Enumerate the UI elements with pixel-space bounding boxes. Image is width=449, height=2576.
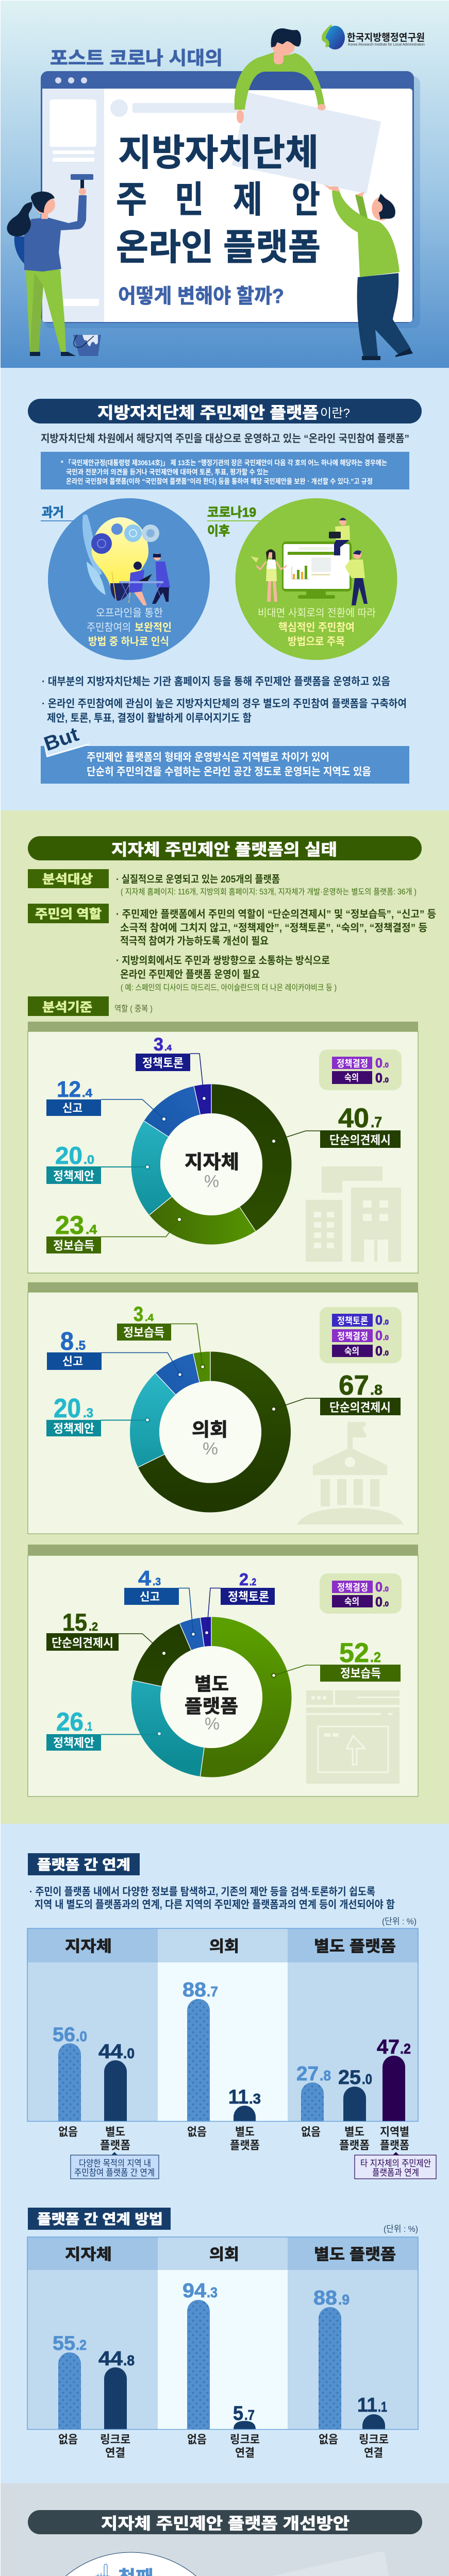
value: 88.7: 88 — [182, 1979, 206, 2001]
callout: policy proposal 26.1: 26 — [56, 1707, 84, 1736]
axis labels — [58, 2126, 409, 2151]
axis labels: 없음 — [319, 2433, 338, 2446]
legend: zero values: 0 — [375, 1328, 383, 1343]
note box: legal basis: * 「국민제안규정(대통령령 제30614호)」 제 13조는 “행정기관의 장은 국민제안이 다음 각 호의 어느 하나에 해당하는 경우에는 — [61, 459, 387, 467]
callout: policy proposal 20.0 — [46, 1142, 149, 1184]
callout: But: 단순히 주민의견을 수렴하는 온라인 공간 정도로 운영되는 지역도 있음 — [87, 766, 371, 778]
circle: after COVID online participation: 비대면 사회로의 전환에 따라 — [258, 607, 376, 619]
callout: local platforms — [71, 2152, 159, 2179]
legend: zero values: 0 — [375, 1594, 383, 1609]
heading pill: 지방자치단체 주민제안 플랫폼 — [97, 404, 319, 422]
illustration: monitor and people — [251, 518, 368, 605]
callout: simple opinion 67.8: .8 — [370, 1382, 383, 1398]
axis labels — [58, 2433, 389, 2460]
callout: information 23.4 — [46, 1211, 181, 1253]
value: 25.0: .0 — [362, 2071, 372, 2087]
icon: web upload window — [306, 1690, 400, 1784]
value: 44.0: 44 — [98, 2041, 123, 2063]
panel: improvement plans — [1, 2483, 449, 2576]
icon: paint bucket — [73, 335, 101, 356]
legend: zero values: .0 — [383, 1585, 389, 1593]
value: 88.9 — [313, 2287, 350, 2309]
circle: first — [30, 2552, 232, 2576]
label: past — [41, 505, 77, 521]
axis labels: 링크로 — [100, 2433, 130, 2446]
callout: information 23.4: 정보습득 — [53, 1239, 94, 1252]
note box: legal basis — [41, 452, 409, 489]
legend: zero values: 0 — [375, 1070, 383, 1086]
value: 94.3 — [182, 2280, 218, 2302]
bar chart: links: 별도 플랫폼 — [314, 1938, 396, 1955]
legend: zero values: 정책토론 — [337, 1316, 368, 1326]
legend: zero values: 정책결정 — [337, 1331, 368, 1342]
callout: report 12.4: .4 — [82, 1087, 93, 1099]
center label: 별도 — [194, 1674, 229, 1694]
definition: 지방자치단체 차원에서 해당지역 주민을 대상으로 운영하고 있는 “온라인 국민참여 플랫폼” — [41, 433, 409, 445]
value: 11.3: 11 — [228, 2086, 248, 2108]
callout: simple opinion 15.2: .2 — [89, 1620, 98, 1633]
callout: local platforms: 주민참여 플랫폼 간 연계 — [74, 2167, 155, 2178]
heading: links between platforms: 플랫폼 간 연계 — [37, 1857, 130, 1873]
text: analysis target: ( 지자체 홈페이지: 116개, 지방의회 홈페이지: 53개, 지자체가 개발·운영하는 별도의 플랫폼: 36개 ) — [121, 887, 417, 896]
callout: information 3.4 — [117, 1303, 205, 1369]
title text: 온라인 플랫폼 — [116, 227, 321, 267]
heading pill: 지자체 주민제안 플랫폼 개선방안 — [101, 2515, 350, 2533]
text: role of residents: 소극적 참여에 그치지 않고, “정책제안”, “정책토론”, “숙의”, “정책결정” 등 — [120, 922, 427, 934]
circle: past offline participation: 방법 중 하나로 인식 — [88, 636, 169, 648]
value: 5.7: 5 — [233, 2402, 243, 2425]
bullet text — [42, 676, 407, 724]
callout: But: 주민제안 플랫폼의 형태와 운영방식은 지역별로 차이가 있어 — [87, 751, 329, 764]
circle: past offline participation: 오프라인을 통한 — [96, 607, 163, 619]
value: 88.9: 88 — [313, 2287, 337, 2309]
legend: zero values: 0 — [375, 1055, 383, 1071]
unit note: (단위 : %) — [384, 2224, 418, 2234]
value: 11.3: .3 — [249, 2091, 261, 2107]
heading pill — [28, 399, 422, 423]
callout: report 4.3: .3 — [153, 1576, 161, 1588]
text: analysis target — [116, 874, 417, 896]
callout: information 23.4: .4 — [86, 1223, 97, 1237]
axis labels: 없음 — [187, 2433, 207, 2446]
value: 47.2: 47 — [377, 2036, 400, 2058]
figure: man on top of window — [235, 28, 326, 123]
label: analysis criteria: 분석기준 — [42, 1001, 92, 1014]
title text: 지방자치단체 — [118, 133, 319, 174]
callout: information 23.4: 23 — [55, 1211, 84, 1240]
bar chart: links: 지자체 — [65, 1938, 112, 1955]
callout: report 4.3: 4 — [138, 1566, 151, 1590]
center label: 의회 — [192, 1419, 228, 1440]
legend: zero values: .0 — [383, 1333, 389, 1342]
callout: simple opinion 67.8: 단순의견제시 — [329, 1400, 391, 1414]
donut: council shares — [144, 1366, 276, 1498]
callout: simple opinion 15.2: 15 — [62, 1608, 87, 1636]
value: 88.7 — [182, 1979, 218, 2001]
text: link explanation: · 주민이 플랫폼 내에서 다양한 정보를 탐색하고, 기존의 제안 등을 검색·토론하기 쉽도록 — [29, 1886, 375, 1898]
bar chart: link method: 별도 플랫폼 — [314, 2246, 396, 2263]
legend: zero values: 0 — [375, 1343, 383, 1359]
callout: information 52.2: 52 — [339, 1638, 369, 1668]
panel: hero — [1, 1, 449, 368]
axis labels: 별도 — [105, 2126, 125, 2138]
center label — [192, 1419, 228, 1458]
bullet text: 제안, 토론, 투표, 결정이 활발하게 이루어지기도 함 — [47, 712, 252, 724]
bar chart: link method: 의회 — [209, 2246, 239, 2263]
bar chart: link method — [27, 2237, 418, 2460]
value: 27.8: .8 — [320, 2067, 331, 2083]
text: role of residents: · 주민제안 플랫폼에서 주민의 역할이 “단순의견제시” 및 “정보습득”, “신고” 등 — [116, 908, 436, 920]
callout: other regions — [355, 2152, 436, 2179]
circle: past offline participation: 보완적인 — [135, 621, 172, 634]
callout: simple opinion 40.7: .7 — [371, 1114, 382, 1131]
callout: policy proposal 20.3 — [46, 1394, 149, 1436]
logo: Korea Research Institute for Local Administration: Korea Research Institute for Local Administration — [348, 42, 425, 46]
label: after COVID-19: 이후 — [207, 524, 230, 538]
callout: report 8.5: 신고 — [62, 1355, 83, 1368]
bullet text: · 온라인 주민참여에 관심이 높은 지방자치단체의 경우 별도의 주민참여 플랫폼을 구축하여 — [42, 698, 407, 710]
callout: simple opinion 67.8: 67 — [339, 1370, 369, 1401]
callout: policy proposal 20.3: .3 — [83, 1406, 93, 1420]
center label: 지자체 — [185, 1151, 239, 1173]
center label: % — [205, 1714, 220, 1733]
value: 94.3: 94 — [182, 2280, 206, 2302]
label: analysis target — [28, 869, 109, 888]
callout: report 12.4 — [46, 1077, 166, 1121]
callout: report 8.5: .5 — [75, 1338, 86, 1353]
callout: simple opinion 40.7: 단순의견제시 — [329, 1133, 391, 1147]
value: 11.1: 11 — [357, 2394, 377, 2416]
callout: policy debate 2.2 — [205, 1570, 275, 1635]
value: 25.0 — [338, 2066, 372, 2089]
callout: policy debate 2.2: .2 — [250, 1577, 256, 1588]
circle: after COVID online participation: 핵심적인 주민참여 — [278, 621, 355, 634]
center label: 플랫폼 — [185, 1696, 238, 1717]
bar chart: links: 의회 — [209, 1938, 239, 1955]
value: 56.0: 56 — [53, 2024, 75, 2046]
title text: 주 — [116, 180, 147, 221]
panel: status of platforms — [1, 810, 449, 1824]
callout: policy proposal 20.3: 정책제안 — [53, 1422, 94, 1435]
axis labels: 없음 — [301, 2126, 321, 2138]
callout: information 52.2: .2 — [370, 1649, 381, 1665]
value: 44.0 — [98, 2041, 135, 2063]
figure: woman with paint roller — [7, 174, 93, 356]
logo: Korea Research Institute for Local Administration: 한국지방행정연구원 — [347, 32, 425, 43]
label: analysis criteria — [28, 996, 109, 1016]
legend: zero values: 숙의 — [344, 1346, 359, 1357]
callout: policy debate 3.4: 정책토론 — [142, 1056, 184, 1070]
text: analysis target: · 실질적으로 운영되고 있는 205개의 플랫폼 — [116, 874, 280, 885]
value: 55.2: .2 — [76, 2337, 87, 2353]
legend: zero values: .0 — [383, 1600, 389, 1608]
donut chart panel: separate platform — [28, 1545, 418, 1797]
circle: after COVID online participation — [235, 498, 397, 660]
callout: other regions: 타 지자체의 주민제안 — [360, 2158, 431, 2168]
axis labels: 연결 — [105, 2446, 125, 2460]
legend: zero values: .0 — [383, 1318, 389, 1326]
value: 27.8 — [296, 2063, 331, 2085]
heading pill: 지자체 주민제안 플랫폼의 실태 — [111, 841, 337, 859]
axis labels: 없음 — [58, 2126, 78, 2138]
label: past: 과거 — [42, 505, 64, 520]
callout: But: But — [41, 723, 81, 756]
text: role of residents: ( 예: 스페인의 디사이드 마드리드, 아이슬란드의 더 나은 레이카야비크 등 ) — [121, 983, 337, 992]
value: 11.1: .1 — [378, 2399, 387, 2415]
callout: policy debate 3.4: 3 — [154, 1035, 163, 1055]
value: 47.2 — [377, 2036, 411, 2058]
callout: policy proposal 20.0: 20 — [55, 1142, 82, 1169]
label: after COVID-19 — [207, 505, 260, 538]
legend: zero values: .0 — [383, 1076, 389, 1084]
axis labels: 플랫폼 — [230, 2139, 260, 2151]
center label: % — [203, 1439, 218, 1458]
donut: local government shares — [146, 1099, 277, 1230]
callout: report 12.4: 12 — [57, 1077, 81, 1102]
circle: past offline participation — [48, 498, 210, 660]
question text: 어떻게 변해야 할까? — [118, 285, 284, 308]
panel: what is a resident proposal platform — [1, 368, 449, 810]
callout: policy debate 3.4: .4 — [164, 1044, 172, 1053]
heading: link method — [28, 2208, 171, 2230]
callout: simple opinion 67.8 — [272, 1370, 401, 1415]
icon: one finger hand — [96, 2564, 109, 2576]
circle: after COVID online participation: 방법으로 주목 — [288, 636, 345, 648]
callout: information 3.4: 3 — [134, 1303, 143, 1326]
legend: zero values — [320, 1573, 402, 1614]
value: 44.8: 44 — [98, 2348, 123, 2370]
callout: simple opinion 40.7 — [272, 1103, 401, 1148]
text: role of residents: · 지방의회에서도 주민과 쌍방향으로 소통하는 방식으로 — [116, 955, 330, 967]
browser window illustration — [41, 71, 420, 328]
text: criteria: 역할 ( 중복 ) — [114, 1004, 153, 1013]
legend: zero values: .0 — [383, 1349, 389, 1357]
callout: simple opinion 15.2 — [46, 1608, 166, 1655]
title text: 제 — [233, 180, 262, 221]
text: role of residents: 적극적 참여가 가능하도록 개선이 필요 — [120, 935, 269, 947]
axis labels: 플랫폼 — [339, 2139, 370, 2151]
bullet text: · 대부분의 지방자치단체는 기관 홈페이지 등을 통해 주민제안 플랫폼을 운영하고 있음 — [42, 676, 390, 687]
callout: policy proposal 26.1 — [46, 1707, 161, 1751]
axis labels: 플랫폼 — [100, 2139, 130, 2151]
value: 55.2: 55 — [53, 2332, 75, 2354]
unit note: (단위 : %) — [382, 1917, 417, 1926]
subtitle: post corona era: 포스트 코로나 시대의 — [50, 47, 223, 69]
callout: information 3.4: .4 — [145, 1313, 154, 1324]
background icon: tilted browser globe — [268, 2552, 401, 2576]
value: 56.0 — [53, 2024, 87, 2046]
note box: legal basis: 국민과 전문가의 의견을 듣거나 국민제안에 대하여 토론, 투표, 평가할 수 있는 — [66, 468, 269, 476]
callout: simple opinion 40.7: 40 — [338, 1103, 369, 1133]
callout: policy proposal 20.3: 20 — [54, 1394, 81, 1423]
axis labels: 없음 — [187, 2126, 207, 2138]
value: 94.3: .3 — [207, 2284, 218, 2300]
title text: 민 — [175, 180, 204, 221]
axis labels: 링크로 — [359, 2433, 389, 2446]
callout: policy debate 2.2: 정책토론 — [228, 1590, 269, 1603]
icon: council building — [297, 1422, 404, 1524]
axis labels: 없음 — [58, 2433, 78, 2446]
legend: zero values: 정책결정 — [337, 1583, 368, 1593]
axis labels: 별도 — [344, 2126, 364, 2138]
legend: zero values: 0 — [375, 1312, 383, 1328]
axis labels: 별도 — [235, 2126, 255, 2138]
value: 44.0: .0 — [123, 2045, 135, 2061]
value: 55.2 — [53, 2332, 87, 2354]
label: after COVID-19: 코로나19 — [207, 505, 256, 520]
callout: But — [41, 723, 409, 784]
value: 56.0: .0 — [76, 2028, 87, 2044]
figure: man holding card — [324, 184, 413, 360]
heading pill — [28, 836, 422, 860]
callout: policy proposal 20.0: 정책제안 — [53, 1170, 94, 1183]
axis labels: 지역별 — [380, 2126, 409, 2138]
value: 5.7: .7 — [244, 2407, 255, 2423]
heading: link method: 플랫폼 간 연계 방법 — [37, 2212, 163, 2227]
callout: policy debate 2.2: 2 — [239, 1570, 248, 1589]
axis labels: 링크로 — [230, 2433, 260, 2446]
value: 88.9: .9 — [338, 2292, 350, 2308]
bar chart: links — [27, 1928, 418, 2151]
text: link explanation: 지역 내 별도의 플랫폼과의 연계, 다른 지역의 주민제안 플랫폼과의 연계 등이 개선되어야 함 — [35, 1899, 395, 1910]
illustration: light bulb and people — [85, 515, 170, 605]
text: link explanation — [29, 1886, 395, 1910]
legend: zero values: 0 — [375, 1579, 383, 1595]
value: 44.8 — [98, 2348, 135, 2370]
legend: zero values: 숙의 — [344, 1597, 359, 1607]
value: 44.8: .8 — [123, 2352, 135, 2368]
label: analysis target: 분석대상 — [42, 873, 93, 886]
title text — [116, 133, 321, 267]
value: 88.7: .7 — [207, 1984, 218, 1999]
callout: other regions: 플랫폼과 연계 — [372, 2167, 419, 2178]
donut chart panel: local government — [28, 1022, 418, 1273]
callout: policy proposal 26.1: .1 — [85, 1720, 92, 1734]
axis labels: 연결 — [364, 2446, 383, 2460]
callout: report 4.3 — [124, 1566, 195, 1636]
center label: % — [204, 1172, 219, 1191]
callout: report 4.3: 신고 — [140, 1590, 160, 1603]
center label — [185, 1674, 238, 1733]
callout: information 52.2 — [272, 1638, 401, 1682]
value: 11.3 — [228, 2086, 261, 2108]
heading: links between platforms — [28, 1853, 140, 1875]
callout: policy debate 3.4 — [136, 1035, 206, 1100]
callout: information 3.4: 정보습득 — [123, 1326, 164, 1339]
callout: policy proposal 20.0: .0 — [84, 1153, 94, 1167]
value: 47.2: .2 — [400, 2041, 411, 2057]
text: role of residents: 온라인 주민제안 플랫폼 운영이 필요 — [120, 969, 260, 980]
callout: report 8.5: 8 — [60, 1328, 74, 1355]
callout: report 12.4: 신고 — [62, 1101, 82, 1115]
value: 5.7 — [233, 2402, 255, 2425]
bar chart: link method: 지자체 — [65, 2246, 112, 2263]
donut chart panel: council — [28, 1282, 418, 1534]
legend: zero values — [320, 1307, 402, 1363]
value: 25.0: 25 — [338, 2066, 361, 2089]
center label — [185, 1151, 239, 1191]
axis labels: 연결 — [235, 2446, 255, 2460]
callout: information 52.2: 정보습득 — [340, 1666, 381, 1680]
value: 27.8: 27 — [296, 2063, 319, 2085]
text: role of residents — [116, 908, 436, 992]
callout: policy proposal 26.1: 정책제안 — [53, 1736, 94, 1750]
legend: zero values — [319, 1049, 402, 1090]
legend: zero values: 숙의 — [344, 1073, 359, 1083]
heading pill — [28, 2510, 422, 2534]
donut: separate platform shares — [146, 1632, 277, 1762]
callout: local platforms: 다양한 목적의 지역 내 — [79, 2158, 151, 2168]
callout: simple opinion 15.2: 단순의견제시 — [52, 1636, 113, 1650]
circle: past offline participation: 주민참여의 — [87, 621, 131, 634]
icon: buildings — [306, 1166, 401, 1262]
logo: Korea Research Institute for Local Administration — [322, 25, 425, 49]
legend: zero values: 정책결정 — [337, 1058, 368, 1069]
legend: zero values: .0 — [383, 1061, 389, 1069]
title text: 안 — [292, 180, 320, 221]
axis labels: 플랫폼 — [380, 2139, 409, 2151]
label: role of residents — [28, 904, 109, 923]
note box: legal basis: 온라인 국민참여 플랫폼(이하 “국민참여 플랫폼”이라 한다) 등을 통하여 해당 국민제안을 보완ㆍ개선할 수 있다.”고 규정 — [66, 478, 373, 485]
callout: report 8.5 — [47, 1328, 182, 1377]
label: role of residents: 주민의 역할 — [35, 907, 102, 921]
heading pill: 이란? — [320, 406, 350, 420]
panel: links between platforms — [1, 1824, 449, 2483]
